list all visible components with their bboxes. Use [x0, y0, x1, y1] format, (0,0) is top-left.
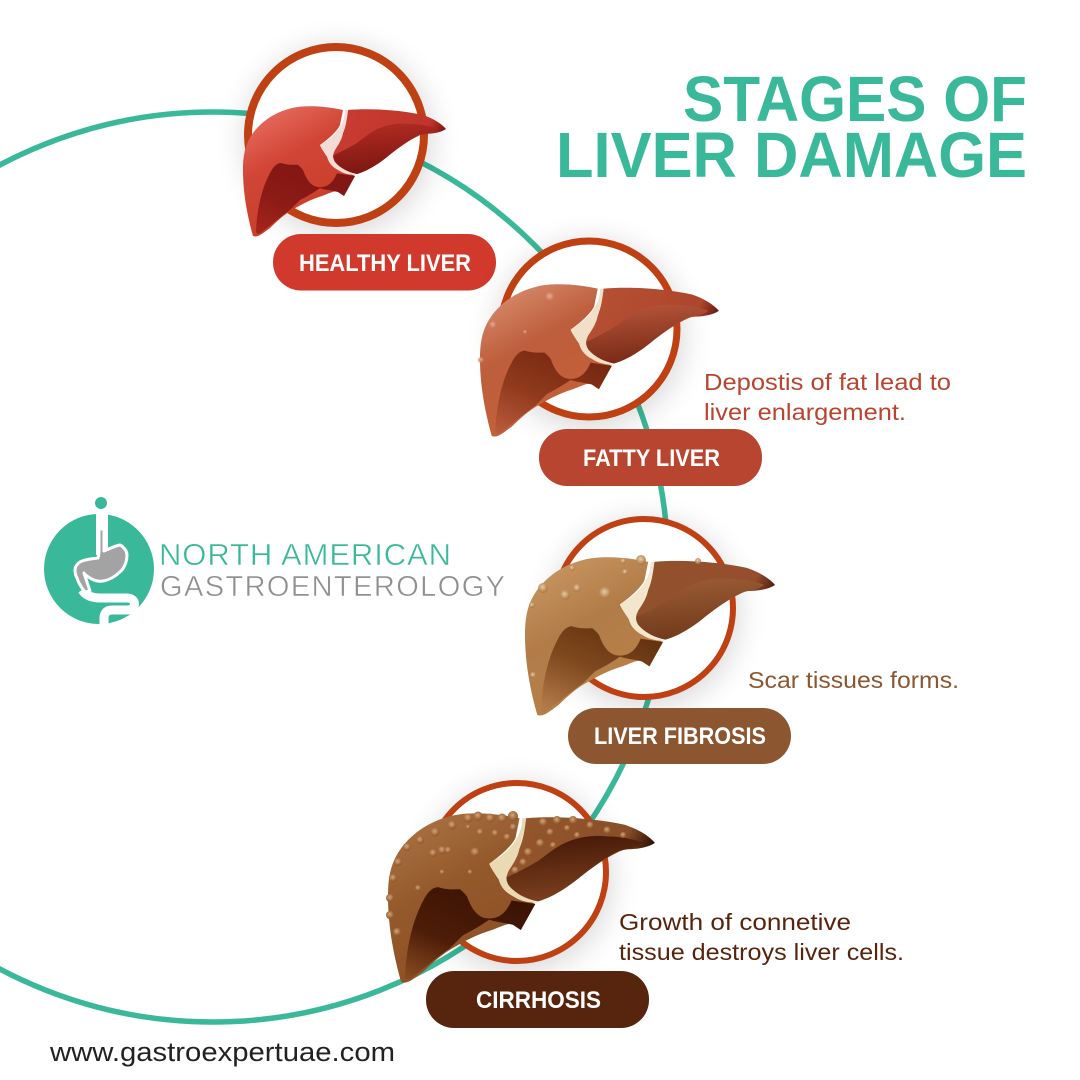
icon: healthy liver	[243, 106, 446, 236]
text: logo name: GASTROENTEROLOGY	[160, 571, 505, 603]
panel: healthy liver	[243, 46, 496, 290]
text: cirrhosis description	[619, 909, 904, 965]
text: fatty liver description: Depostis of fat lead to	[704, 369, 951, 395]
text: fibrosis description: Scar tissues forms.	[748, 667, 959, 693]
text: cirrhosis description: Growth of connetive	[619, 909, 851, 935]
icon: stomach emblem	[44, 497, 154, 625]
label pill: fatty liver	[539, 429, 762, 486]
icon: ring	[428, 783, 606, 961]
icon: cirrhosis liver	[386, 811, 655, 983]
label pill: fatty liver: FATTY LIVER	[583, 445, 720, 472]
text: logo name	[159, 537, 505, 603]
icon: ring	[555, 519, 733, 697]
icon: fibrosis liver	[525, 555, 775, 715]
icon: ring	[248, 47, 424, 223]
label pill: cirrhosis	[426, 971, 649, 1028]
icon: ring	[501, 241, 677, 417]
panel: liver fibrosis	[525, 519, 959, 764]
icon: fatty liver	[478, 284, 719, 436]
label pill: cirrhosis: CIRRHOSIS	[476, 987, 601, 1014]
title: STAGES OF	[683, 63, 1027, 135]
title: LIVER DAMAGE	[556, 119, 1027, 191]
text: logo name: NORTH AMERICAN	[159, 537, 451, 572]
title	[556, 63, 1027, 191]
teal progress arc	[0, 112, 668, 1022]
label pill: liver fibrosis	[568, 708, 791, 764]
text: fatty liver description	[704, 369, 951, 425]
text: cirrhosis description: tissue destroys liver cells.	[619, 939, 904, 965]
label pill: healthy liver	[273, 234, 496, 290]
logo: North American Gastroenterology	[44, 497, 505, 625]
label pill: healthy liver: HEALTHY LIVER	[299, 250, 471, 277]
text: fatty liver description: liver enlargement.	[704, 399, 906, 425]
panel: cirrhosis	[386, 783, 904, 1028]
label pill: liver fibrosis: LIVER FIBROSIS	[594, 723, 766, 750]
website url: www.gastroexpertuae.com	[49, 1037, 395, 1067]
panel: fatty liver	[478, 241, 951, 486]
